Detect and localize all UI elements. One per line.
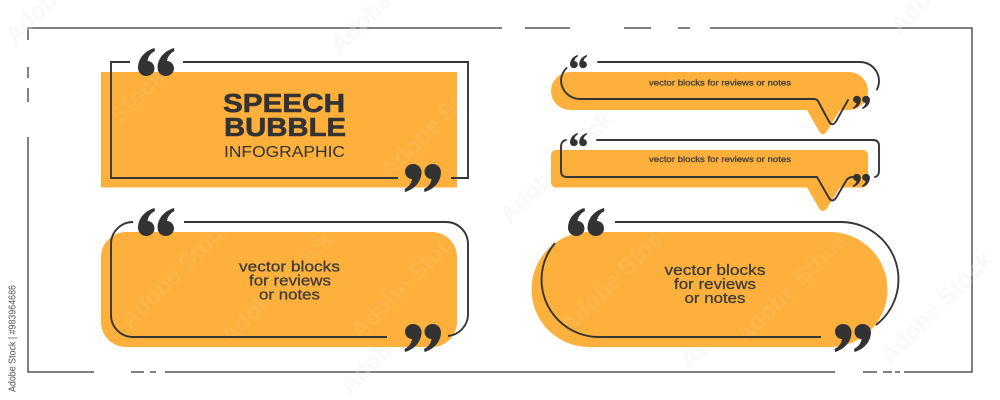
pill outline	[542, 222, 898, 337]
panel: rounded speech bubble with tail	[551, 55, 879, 134]
title: BUBBLE	[224, 112, 346, 142]
pill watermark	[555, 216, 853, 349]
faint watermark on white: Adobe Stock	[495, 106, 618, 229]
rounded panel watermark: Adobe Stock	[115, 211, 238, 334]
title panel watermark	[105, 61, 498, 184]
icon: closing quote	[404, 164, 441, 192]
panel: rounded rectangle bubble	[101, 208, 468, 352]
pill watermark: Adobe Stock	[555, 216, 678, 339]
panel: square speech bubble with tail	[551, 133, 879, 211]
icon: closing quote	[834, 324, 871, 352]
pill watermark: Adobe Stock	[730, 226, 853, 349]
title panel watermark: Stock	[105, 63, 171, 129]
square speech bubble outline	[561, 140, 879, 200]
rounded speech bubble outline	[561, 62, 879, 124]
title: INFOGRAPHIC	[224, 144, 345, 161]
title	[223, 88, 346, 161]
square speech bubble text: vector blocks for reviews or notes	[649, 154, 791, 164]
faint watermark on white: Adobe Stock	[675, 251, 798, 374]
pill text: vector blocks	[664, 262, 766, 279]
icon: opening quote	[568, 208, 604, 236]
icon: opening quote	[570, 55, 587, 68]
icon: opening quote	[138, 48, 174, 76]
title: SPEECH	[223, 88, 345, 118]
rounded panel orange block	[101, 232, 457, 347]
icon: opening quote	[138, 208, 174, 236]
panel: rectangular title bubble	[101, 48, 498, 192]
rounded panel watermark: Adobe Stock	[345, 221, 468, 344]
rounded panel watermark: Adobe Stock	[215, 226, 338, 349]
pill text: or notes	[684, 290, 746, 307]
pill text	[664, 262, 766, 307]
title panel watermark: Adobe Stock	[375, 61, 498, 184]
icon: closing quote	[853, 96, 870, 109]
rounded panel text: vector blocks	[239, 258, 340, 276]
stock id side label: Adobe Stock | #983964686	[6, 285, 18, 392]
icon: opening quote	[570, 133, 587, 146]
rounded panel text	[239, 258, 340, 304]
rounded panel watermark	[115, 211, 468, 349]
pill orange shape	[532, 232, 888, 347]
faint watermark on white: Adobe Stock	[335, 276, 458, 399]
rounded speech bubble text: vector blocks for reviews or notes	[649, 78, 791, 88]
rounded panel outline	[111, 222, 468, 337]
icon: closing quote	[853, 174, 870, 187]
square speech bubble orange shape	[551, 150, 868, 211]
faint watermark on white: Adobe Stock	[875, 246, 998, 369]
rounded speech bubble orange shape	[551, 72, 868, 134]
title panel outline	[111, 62, 468, 178]
icon: closing quote	[404, 324, 441, 352]
pill text: for reviews	[674, 276, 756, 293]
panel: pill bubble	[532, 208, 898, 352]
rounded panel text: or notes	[259, 286, 320, 304]
rounded panel text: for reviews	[249, 272, 331, 290]
title panel orange block	[101, 72, 457, 188]
